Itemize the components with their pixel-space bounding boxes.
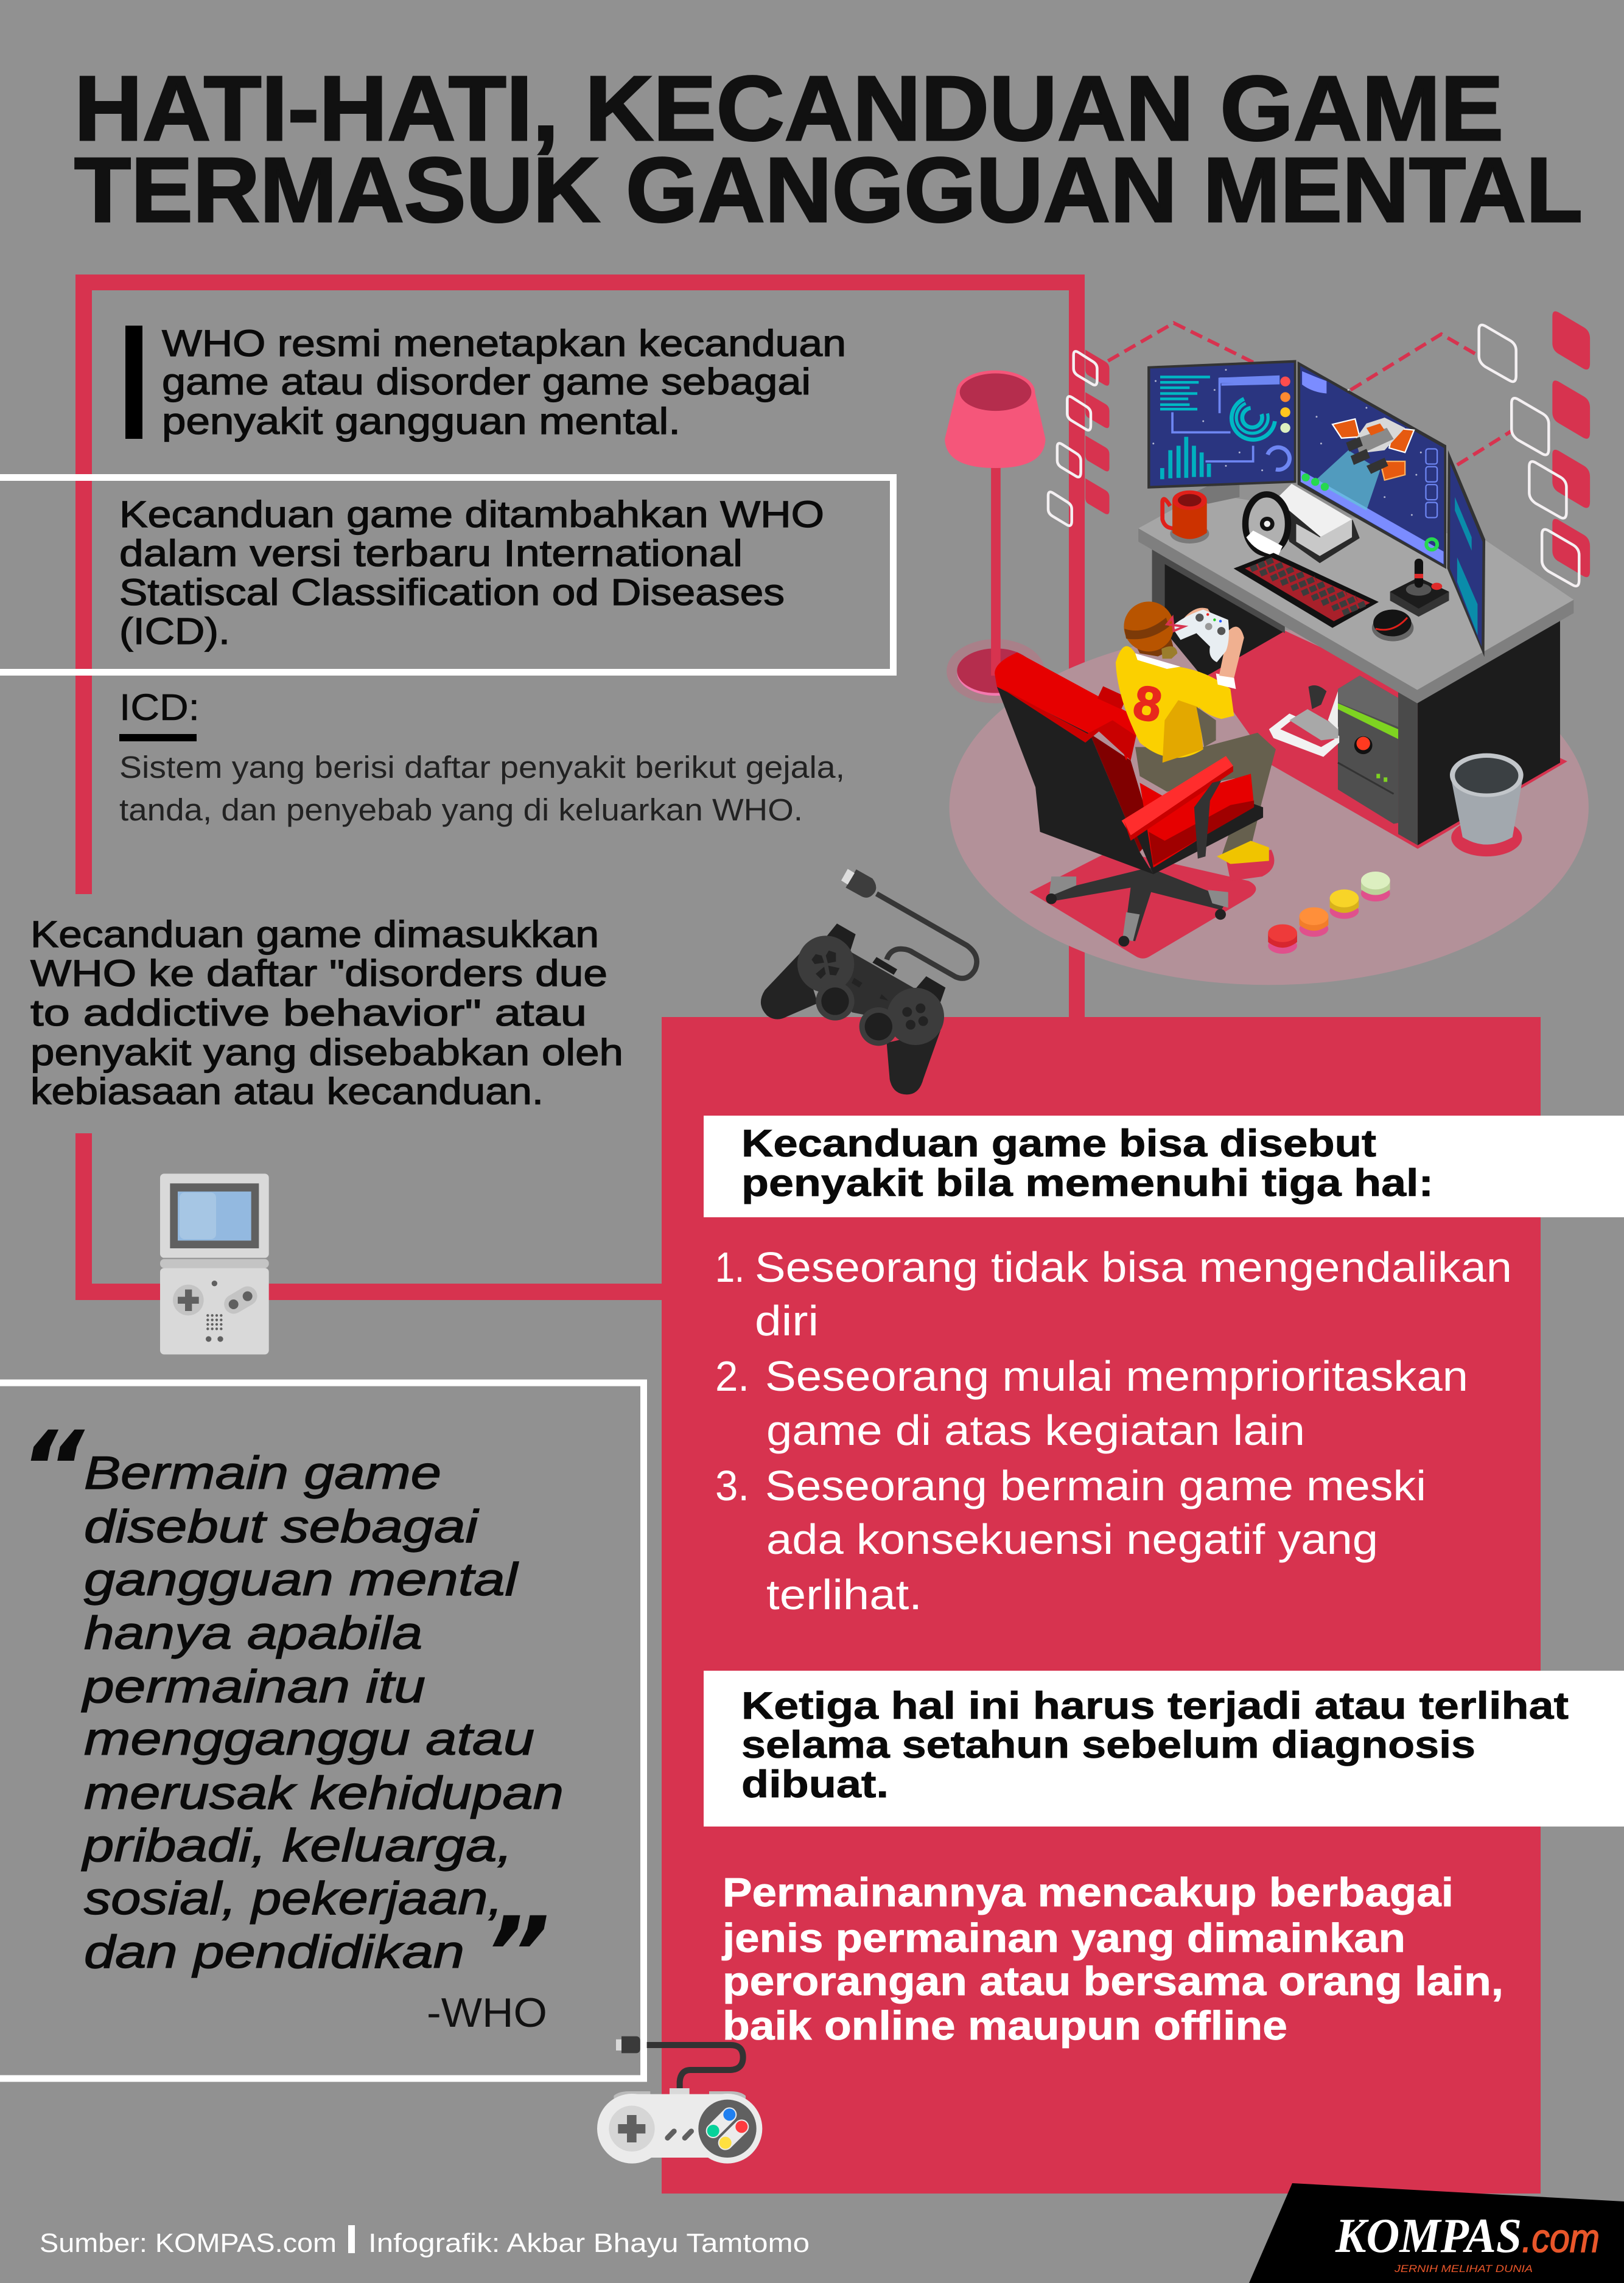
white outlined box: ICD: Kecanduan game ditambahkan WHO [119, 494, 824, 535]
quote text: hanya apabila [84, 1607, 422, 1659]
numbered list: 3. [715, 1462, 749, 1509]
white heading strip [704, 1116, 1624, 1217]
pedals [1269, 685, 1339, 757]
numbered list: Seseorang tidak bisa mengendalikan [755, 1243, 1512, 1291]
mouse [1372, 610, 1413, 642]
closing quotation mark: ” [485, 1895, 550, 2012]
arm and hands [1180, 608, 1214, 635]
quote text: pribadi, keluarga, [82, 1820, 513, 1872]
source credit: Infografik: Akbar Bhayu Tamtomo [368, 2228, 810, 2258]
text block: disorders due to addictive behavior [30, 914, 623, 1112]
quote text: merusak kehidupan [84, 1767, 564, 1819]
quote text: dan pendidikan [84, 1926, 464, 1978]
white closing text [721, 1870, 1503, 2049]
quote text: gangguan mental [84, 1554, 519, 1606]
shirt number: 8 [1130, 675, 1166, 732]
chair base [1046, 867, 1228, 946]
source credit [40, 2225, 810, 2258]
red frame [75, 274, 1085, 1300]
ICD definition: Sistem yang berisi daftar penyakit berikut gejala, [119, 750, 845, 785]
white heading strip: penyakit bila memenuhi tiga hal: [741, 1162, 1433, 1204]
armrest [1122, 756, 1233, 859]
statement text with black bar [125, 323, 846, 442]
white note strip: Ketiga hal ini harus terjadi atau terlihat [741, 1685, 1569, 1727]
icon: handheld console [160, 1173, 269, 1354]
ICD definition: ICD: [119, 687, 200, 728]
head [1133, 631, 1174, 657]
white note strip: dibuat. [741, 1763, 889, 1806]
seat [1135, 774, 1263, 874]
trousers [1135, 733, 1276, 856]
red panel [662, 1017, 1624, 2194]
white outlined box: ICD: Statiscal Classification od Diseases [119, 572, 785, 613]
text block: disorders due to addictive behavior: kebiasaan atau kecanduan. [30, 1071, 544, 1112]
joystick [1390, 559, 1449, 617]
ICD definition [119, 687, 845, 827]
dashed connector lines [1108, 323, 1511, 465]
Kompas logo block: KOMPAS [1335, 2209, 1522, 2263]
quote attribution: -WHO [427, 1990, 547, 2036]
numbered list: ada konsekuensi negatif yang [766, 1516, 1378, 1563]
white outlined box: ICD: (ICD). [119, 610, 230, 652]
title: HATI-HATI, KECANDUAN GAME [74, 57, 1503, 159]
white closing text: perorangan atau bersama orang lain, [723, 1959, 1503, 2004]
shirt [1116, 646, 1234, 758]
chair mat [1029, 850, 1256, 959]
quote text: mengganggu atau [84, 1713, 534, 1765]
illustration: gaming room [945, 312, 1590, 985]
white closing text: Permainannya mencakup berbagai [723, 1870, 1454, 1915]
numbered list: Seseorang bermain game meski [765, 1462, 1426, 1509]
desk [1138, 492, 1573, 845]
numbered list [715, 1243, 1512, 1618]
keyboard [1234, 553, 1379, 628]
quote text: Bermain game [84, 1447, 441, 1499]
white closing text: baik online maupun offline [723, 2003, 1287, 2049]
retro console [1276, 484, 1360, 563]
white outlined box: ICD [0, 477, 894, 672]
numbered list: 1. [715, 1243, 744, 1291]
text block: disorders due to addictive behavior: penyakit yang disebabkan oleh [30, 1032, 623, 1073]
coloured buttons [1268, 872, 1390, 954]
chair back [995, 652, 1153, 874]
white note strip: selama setahun sebelum diagnosis [741, 1724, 1475, 1766]
numbered list: terlihat. [766, 1571, 922, 1618]
spaceship [1332, 418, 1414, 480]
numbered list: game di atas kegiatan lain [766, 1407, 1305, 1454]
racing wheel [1245, 494, 1288, 556]
text block: disorders due to addictive behavior: Kecanduan game dimasukkan [30, 914, 599, 955]
numbered list: Seseorang mulai memprioritaskan [765, 1352, 1468, 1400]
white outlined box: ICD: dalam versi terbaru International [119, 533, 743, 574]
text block: disorders due to addictive behavior: to addictive behavior" atau [30, 992, 587, 1033]
red floor under desk [1208, 626, 1567, 849]
waste bin [1450, 753, 1524, 856]
center monitor [1298, 362, 1446, 569]
white note strip [704, 1671, 1624, 1827]
source credit: Sumber: KOMPAS.com [40, 2228, 337, 2258]
right monitor [1447, 450, 1485, 657]
quote box [0, 1383, 644, 2078]
opening quotation mark: “ [19, 1410, 85, 1526]
numbered list: diri [755, 1297, 819, 1344]
gamer [1116, 601, 1276, 864]
icon: PlayStation-style controller [761, 869, 977, 1094]
Kompas logo block: JERNIH MELIHAT DUNIA [1394, 2263, 1533, 2274]
quote text: permainan itu [82, 1661, 425, 1713]
numbered list: 2. [715, 1352, 749, 1400]
text block: disorders due to addictive behavior: WHO ke daftar "disorders due [30, 953, 607, 994]
title: TERMASUK GANGGUAN MENTAL [74, 138, 1583, 241]
controller [1172, 610, 1229, 662]
icon: SNES-style controller [597, 2037, 762, 2164]
decorative red tiles [1085, 312, 1590, 577]
statement text with black bar: WHO resmi menetapkan kecanduan [162, 323, 846, 364]
rug [950, 630, 1589, 985]
white outline tiles [1048, 325, 1579, 586]
white heading strip: Kecanduan game bisa disebut [741, 1122, 1376, 1165]
white closing text: jenis permainan yang dimainkan [721, 1915, 1405, 1961]
quote text: sosial, pekerjaan, [84, 1873, 503, 1925]
PC tower [1338, 676, 1398, 824]
left monitor [1147, 360, 1296, 504]
statement text with black bar: penyakit gangguan mental. [162, 400, 681, 442]
statement text with black bar: game atau disorder game sebagai [162, 361, 811, 402]
Kompas logo block [1249, 2183, 1624, 2283]
Kompas logo block: .com [1522, 2215, 1600, 2260]
mug [1163, 491, 1209, 544]
quote text [82, 1447, 564, 1978]
title [74, 57, 1583, 241]
floor lamp [945, 370, 1046, 704]
quote text: disebut sebagai [84, 1501, 480, 1553]
ICD definition: tanda, dan penyebab yang di keluarkan WHO. [119, 792, 803, 827]
